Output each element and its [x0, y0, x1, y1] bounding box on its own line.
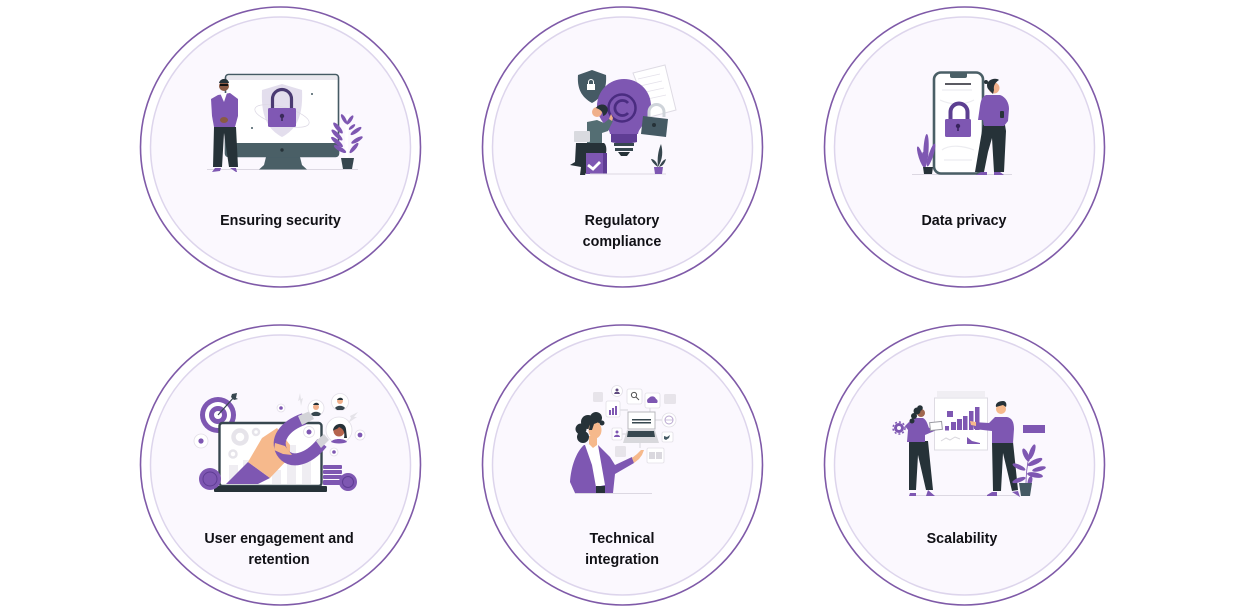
panel background circle	[140, 325, 420, 605]
label: integration	[585, 552, 659, 568]
panel: user engagement and retention	[140, 325, 420, 605]
label: Ensuring security	[220, 213, 341, 229]
illustration: phone with padlock and person	[912, 72, 1012, 175]
label: Scalability	[927, 531, 997, 547]
illustration: two people with growth chart	[893, 391, 1046, 497]
panel background circle	[140, 7, 420, 287]
panel background circle	[482, 7, 762, 287]
illustration: magnet hand attracting users	[194, 393, 365, 492]
label: Technical	[590, 531, 654, 547]
panel: data privacy	[824, 7, 1104, 287]
label	[583, 213, 661, 250]
label: retention	[248, 552, 310, 568]
illustration: guard with monitor and lock	[207, 74, 364, 172]
label: User engagement and	[204, 531, 354, 547]
panel: regulatory compliance	[482, 7, 762, 287]
panel: technical integration	[482, 325, 762, 605]
panel: ensuring security	[140, 7, 420, 287]
label: Regulatory	[585, 213, 659, 229]
panel background circle	[824, 325, 1104, 605]
panel background circle	[824, 7, 1104, 287]
illustration: woman presenting connected laptop	[570, 386, 676, 494]
panel: scalability	[824, 325, 1104, 605]
panel background circle	[482, 325, 762, 605]
label: Data privacy	[921, 213, 1007, 229]
label	[585, 531, 659, 568]
illustration: woman with copyright bulb	[570, 65, 676, 175]
label	[204, 531, 354, 568]
label: compliance	[583, 234, 661, 250]
